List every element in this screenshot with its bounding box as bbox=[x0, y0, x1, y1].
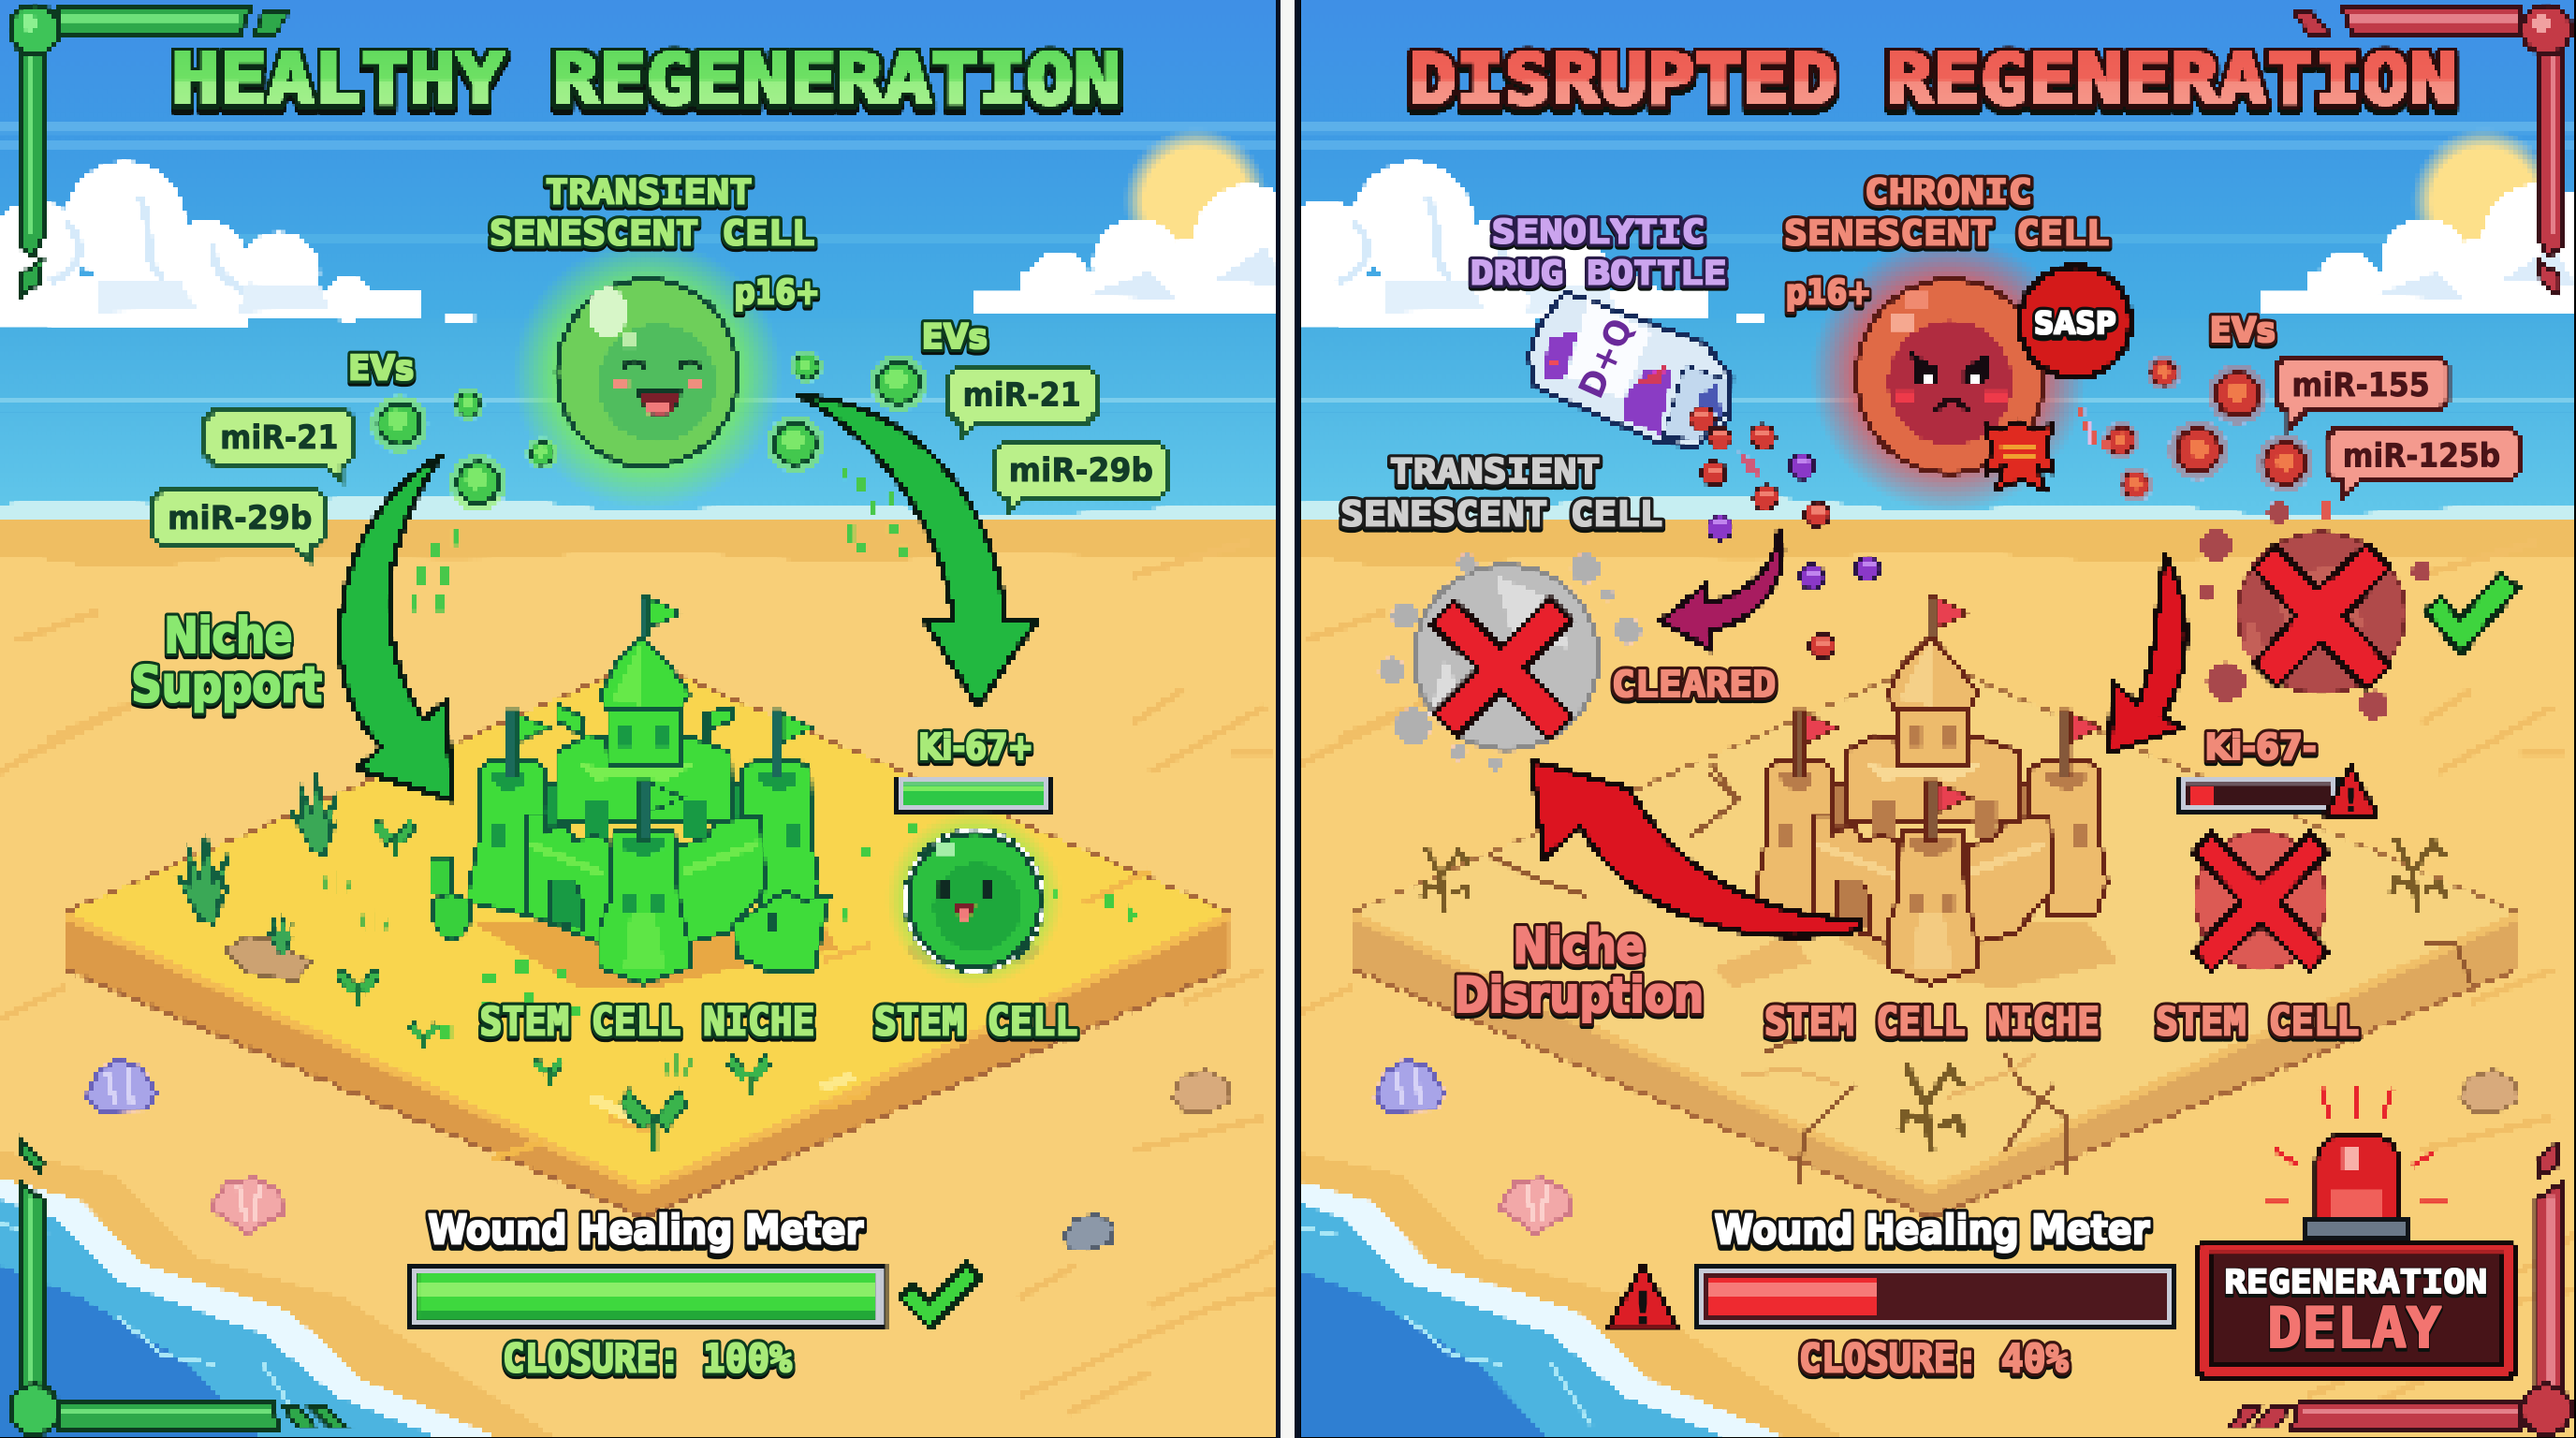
icon: red X over chronic cell bbox=[2254, 544, 2391, 688]
speech bubbles: miRNA bbox=[2276, 357, 2519, 498]
label: transient senescent cell cleared bbox=[1340, 451, 1662, 535]
label: p16: p16+ bbox=[1786, 272, 1871, 313]
label: EVs right: EVs bbox=[922, 316, 988, 357]
wound healing meter: full bbox=[407, 1264, 887, 1329]
bubble text: healthy: miR-29b bbox=[1009, 451, 1153, 490]
panel: disrupted regeneration bbox=[1275, 0, 2576, 1438]
scene artwork: disrupted beach bbox=[1275, 0, 2576, 1438]
arrow: right green curve bbox=[800, 396, 1036, 707]
glow: transient cell bbox=[513, 240, 782, 509]
label: stem cell niche: STEM CELL NICHE bbox=[1764, 999, 2100, 1045]
bottle label text: D+Q bbox=[1571, 313, 1641, 404]
label: niche disruption: Niche bbox=[1513, 917, 1645, 975]
label: closure 100%: CLOSURE: 100% bbox=[503, 1336, 793, 1382]
badge: SASP bbox=[2019, 266, 2130, 378]
wound healing meter: low bbox=[1695, 1264, 2175, 1329]
beach background bbox=[1275, 0, 2576, 1438]
label: transient senescent cell bbox=[490, 172, 815, 254]
title: healthy regeneration: HEALTHY REGENERATION bbox=[171, 41, 1121, 121]
icon: red X over transient cell bbox=[1431, 598, 1573, 740]
warning mark: meter: ! bbox=[1632, 1282, 1653, 1336]
arrow: senolytic clearance bbox=[1661, 529, 1783, 651]
icon: check mark bbox=[900, 1264, 981, 1328]
cell: transient senescent cell bbox=[557, 279, 738, 466]
bubble text bbox=[2291, 366, 2500, 475]
isometric island: healthy bbox=[66, 661, 1229, 1218]
label: stem cell: STEM CELL bbox=[2156, 999, 2359, 1045]
label: Ki-67+: Ki-67+ bbox=[918, 726, 1033, 769]
dead plants bbox=[1423, 838, 2445, 1153]
alert panel: regeneration delay bbox=[2197, 1239, 2517, 1380]
corner frame: bottom left bbox=[10, 1138, 348, 1434]
cell: cleared transient senescent cell bbox=[1379, 553, 1641, 770]
label: niche disruption: Disruption bbox=[1454, 967, 1704, 1024]
outlined labels: disrupted bbox=[1340, 172, 2487, 1382]
sand castle: stem cell niche bbox=[1756, 596, 2107, 984]
corner frame: top left bbox=[10, 5, 287, 296]
speech bubbles: miRNA bbox=[153, 366, 1168, 562]
label: EVs left: EVs bbox=[348, 347, 414, 388]
stem cell: damaged bbox=[2195, 831, 2326, 970]
label: niche support bbox=[131, 608, 322, 713]
arrow: niche disruption bbox=[1531, 761, 1862, 936]
label: closure 40%: CLOSURE: 40% bbox=[1799, 1336, 2069, 1382]
arrow: left green curve bbox=[340, 455, 452, 800]
divider bbox=[1276, 0, 1300, 1438]
label: wound healing meter: Wound Healing Meter bbox=[1714, 1207, 2150, 1255]
corner frame: top right bbox=[2295, 5, 2571, 296]
label: Ki-67-: Ki-67- bbox=[2204, 726, 2317, 769]
label: p16: p16+ bbox=[735, 272, 820, 313]
label: senolytic drug bottle bbox=[1471, 213, 1727, 293]
bubble text: healthy: miR-29b bbox=[168, 499, 312, 537]
pills: spilled drug bbox=[1690, 406, 1881, 658]
arrow: chronic cell to niche bbox=[2110, 553, 2186, 753]
icon: grey pebble bbox=[1064, 1214, 1114, 1251]
extracellular vesicles: red bbox=[2078, 356, 2330, 520]
bubble text: miR-125b bbox=[2343, 436, 2500, 475]
cell: chronic senescent cell bbox=[1856, 279, 2043, 473]
alert text: delay: DELAY bbox=[2267, 1297, 2441, 1361]
label: wound healing meter: Wound Healing Meter bbox=[428, 1207, 864, 1255]
label: senolytic drug bottle: SENOLYTIC bbox=[1492, 213, 1705, 252]
Ki-67 gauge bbox=[894, 775, 1055, 815]
bubble text: healthy: miR-21 bbox=[962, 376, 1081, 415]
scene artwork: healthy beach bbox=[0, 0, 1338, 1438]
alarm siren bbox=[2264, 1084, 2448, 1258]
label: stem cell niche: STEM CELL NICHE bbox=[479, 999, 815, 1045]
Ki-67 gauge: low bbox=[2177, 775, 2341, 815]
bottle: senolytic drug bbox=[1529, 292, 1732, 447]
label: niche support: Support bbox=[131, 656, 322, 713]
extracellular vesicles bbox=[371, 350, 928, 611]
corner frame: bottom right bbox=[2230, 1142, 2571, 1434]
icon: red X over stem cell bbox=[2193, 833, 2328, 971]
alert text: regeneration: REGENERATION bbox=[2224, 1263, 2487, 1301]
sand castle: stem cell niche bbox=[468, 596, 829, 984]
isometric island: disrupted bbox=[1354, 661, 2517, 1218]
label: cleared: CLEARED bbox=[1612, 664, 1776, 706]
bubble text: miR-155 bbox=[2291, 366, 2430, 404]
glow: chronic cell bbox=[1810, 237, 2086, 513]
label: chronic senescent cell: CHRONIC bbox=[1865, 172, 2032, 213]
outlined labels: healthy bbox=[131, 172, 1077, 1382]
icon: green check bbox=[2425, 574, 2519, 654]
bubble text: healthy bbox=[168, 376, 1153, 537]
label: transient senescent cell cleared: SENESCENT CELL bbox=[1340, 494, 1662, 535]
cell: destroyed chronic cell bbox=[2198, 501, 2432, 720]
label: transient senescent cell: SENESCENT CELL bbox=[490, 213, 815, 254]
bubble text: healthy: miR-21 bbox=[220, 418, 339, 457]
label: niche disruption bbox=[1454, 917, 1704, 1024]
label: chronic senescent cell bbox=[1784, 172, 2110, 254]
icon: meter warning bbox=[1606, 1265, 1679, 1329]
label: chronic senescent cell: SENESCENT CELL bbox=[1784, 213, 2110, 254]
label: senolytic drug bottle: DRUG BOTTLE bbox=[1471, 255, 1727, 293]
label: niche support: Niche bbox=[165, 608, 292, 665]
warning mark: Ki-67: ! bbox=[2344, 782, 2359, 820]
label: EVs: EVs bbox=[2210, 310, 2276, 350]
plain text: disrupted bubbles and marks bbox=[1571, 313, 2500, 1336]
plants and sprouts bbox=[176, 773, 1138, 1151]
icon: SASP burst bbox=[1984, 420, 2054, 492]
badge text: SASP: SASP bbox=[2034, 304, 2116, 341]
stem cell: healthy bbox=[886, 810, 1063, 988]
icon: Ki-67 warning bbox=[2324, 766, 2378, 815]
label: transient senescent cell: TRANSIENT bbox=[546, 172, 753, 213]
label: transient senescent cell cleared: TRANSIENT bbox=[1390, 451, 1600, 492]
title: disrupted regeneration: DISRUPTED REGENERATION bbox=[1409, 41, 2457, 121]
beach background bbox=[0, 0, 1338, 1438]
panel: healthy regeneration bbox=[0, 0, 1338, 1438]
label: stem cell: STEM CELL bbox=[874, 999, 1077, 1045]
